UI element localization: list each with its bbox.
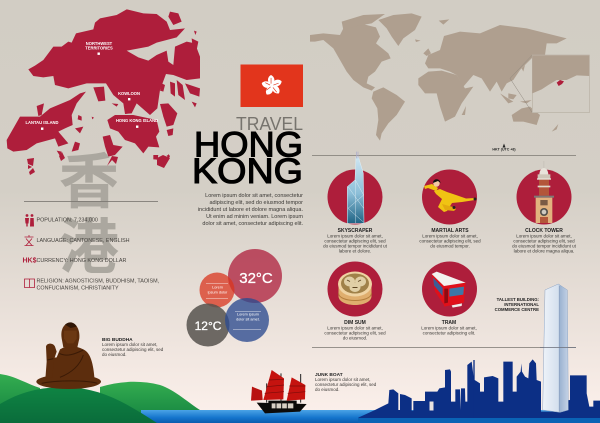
label: junk boat: do eiusmod.	[315, 387, 340, 392]
heading: MARTIAL ARTS	[431, 228, 469, 234]
intro text: adipiscing elit, sed do eiusmod tempor	[209, 200, 303, 206]
heading: SKYSCRAPER	[338, 228, 373, 234]
climate bubbles	[186, 249, 282, 346]
map labels	[26, 41, 158, 130]
icon circle	[328, 170, 382, 224]
Chinese characters watermark	[59, 149, 119, 281]
map: outlying islands	[27, 152, 170, 175]
bubble text: red	[206, 283, 228, 298]
body: consectetur adipiscing elit, sed	[324, 330, 386, 336]
language text: LANGUAGE: CANTONESE, ENGLISH	[36, 238, 130, 244]
body: consectetur adipiscing elit, sed	[513, 238, 575, 244]
religion text	[36, 278, 160, 292]
label: tallest building: INTERNATIONAL	[504, 302, 539, 307]
water front strip	[358, 418, 600, 423]
divider over tower	[540, 346, 576, 349]
Chinese characters watermark: 港	[59, 214, 119, 281]
body: do eiusmod tempor.	[430, 244, 470, 248]
population text: POPULATION: 7,234,000	[36, 218, 98, 224]
map labels: KOWLOON	[118, 91, 140, 96]
body	[512, 234, 577, 254]
map labels: LANTAU ISLAND	[26, 120, 58, 125]
title: TRAVEL	[236, 113, 303, 134]
body: Lorem ipsum dolor sit amet,	[516, 234, 572, 238]
bubble text: blue: dolor sit amet.	[236, 318, 260, 322]
icon: junk boat	[251, 370, 307, 413]
religion text: RELIGION: AGNOSTICISM, BUDDHISM, TAOISM,	[36, 278, 160, 284]
world map	[310, 13, 567, 141]
heading: DIM SUM	[344, 320, 366, 326]
label: junk boat: Lorem ipsum dolor sit amet,	[315, 377, 371, 382]
icon: International Commerce Centre tower	[543, 284, 568, 412]
intro text: incididunt ut labore et dolore magna aliqua.	[198, 207, 303, 213]
bubble text: red: Lorem	[212, 286, 223, 290]
intro text: dolor sit amet, consectetur adipiscing elit.	[202, 221, 303, 227]
body: consectetur adipiscing elit, sed	[324, 238, 386, 244]
label: big buddha: do eiusmod.	[102, 352, 127, 357]
title	[192, 113, 303, 191]
body	[419, 234, 481, 248]
card: martial arts	[419, 170, 481, 248]
divider: left	[24, 200, 158, 203]
time zone marker	[492, 144, 516, 152]
title: HONG	[194, 126, 303, 164]
intro text	[198, 193, 303, 227]
card: clock tower	[512, 161, 577, 254]
icon: big buddha statue	[36, 322, 101, 389]
icon: Bank of China Tower	[347, 152, 364, 223]
map: Hong Kong territory	[7, 9, 200, 159]
map labels: TERRITORIES	[85, 46, 113, 50]
body: do eiusmod tempor incididunt ut	[512, 244, 577, 248]
label: junk boat: JUNK BOAT	[315, 372, 343, 378]
bubble text: blue: Lorem ipsum	[237, 312, 259, 316]
skyline	[358, 359, 600, 418]
intro text: Ut enim ad minim veniam. Lorem ipsum	[206, 214, 303, 220]
label: 12: 12°C	[195, 319, 222, 333]
icon circle	[516, 170, 572, 224]
water	[140, 410, 600, 423]
facts list	[22, 214, 160, 292]
body: Lorem ipsum dolor sit amet,	[327, 234, 383, 238]
currency text: CURRENCY: HONG KONG DOLLAR	[36, 258, 126, 264]
label: big buddha: BIG BUDDHA	[102, 337, 133, 343]
label: tallest building: TALLEST BUILDING:	[497, 297, 540, 302]
label: junk boat: consectetur adipiscing elit, sed	[315, 382, 377, 387]
icon: double-decker tram	[432, 272, 466, 308]
body: Lorem ipsum dolor sit amet,	[421, 326, 477, 330]
body: Lorem ipsum dolor sit amet,	[422, 234, 478, 238]
icon: kicking fighter	[424, 179, 476, 212]
bubble text: red: ipsum dolor	[208, 290, 228, 294]
intro text: Lorem ipsum dolor sit amet, consectetur	[205, 193, 303, 199]
body: labore et dolore.	[339, 248, 371, 254]
body: Lorem ipsum dolor sit amet,	[327, 326, 383, 330]
bubble text: blue	[233, 311, 261, 329]
label: tallest building: COMMERCE CENTRE	[495, 307, 539, 312]
label: junk boat	[315, 372, 377, 392]
map labels: NORTHWEST	[86, 41, 113, 46]
body	[421, 326, 477, 336]
card: tram	[421, 262, 477, 336]
heading: TRAM	[442, 320, 456, 326]
icon: population	[25, 214, 34, 226]
label: 32: 32°C	[239, 270, 273, 287]
divider: top right	[312, 154, 576, 157]
title: KONG	[192, 152, 303, 191]
body	[323, 234, 388, 254]
label: big buddha: Lorem ipsum dolor sit amet,	[102, 342, 158, 347]
body: consectetur adipiscing elit.	[423, 330, 475, 336]
icon: steamer basket	[338, 272, 372, 305]
map labels: HONG KONG ISLAND	[116, 118, 158, 123]
label: big buddha: consectetur adipiscing elit, sed	[102, 347, 164, 352]
icon: clock tower	[534, 161, 554, 223]
icon circle	[422, 170, 477, 224]
bubble: red	[200, 272, 234, 308]
icon: currency: HK$	[22, 258, 37, 264]
map inset	[510, 55, 589, 113]
icon circle	[422, 262, 477, 316]
body: labore et dolore magna aliqua.	[514, 248, 574, 254]
label: big buddha	[102, 337, 164, 357]
heading: CLOCK TOWER	[525, 228, 563, 234]
bubble: hot	[228, 249, 282, 303]
Chinese characters watermark: 香	[59, 149, 119, 216]
time zone marker: HKT (UTC +8)	[492, 148, 516, 152]
body: do eiusmod.	[343, 336, 367, 340]
body: consectetur adipiscing elit, sed	[419, 238, 481, 244]
icon circle	[328, 262, 382, 316]
hills	[0, 374, 200, 423]
bubble: cold	[186, 304, 230, 346]
card: dim sum	[324, 262, 386, 340]
icon: religion book	[24, 279, 34, 288]
flag	[240, 64, 303, 107]
body	[324, 326, 386, 340]
body: do eiusmod tempor incididunt ut	[323, 244, 388, 248]
label: tallest building	[495, 297, 540, 312]
card: skyscraper	[323, 152, 388, 254]
bubble: blue	[225, 298, 269, 342]
divider: lower right	[312, 346, 576, 349]
icon: language	[24, 235, 34, 246]
religion text: CONFUCIANISM, CHRISTIANITY	[36, 286, 119, 292]
